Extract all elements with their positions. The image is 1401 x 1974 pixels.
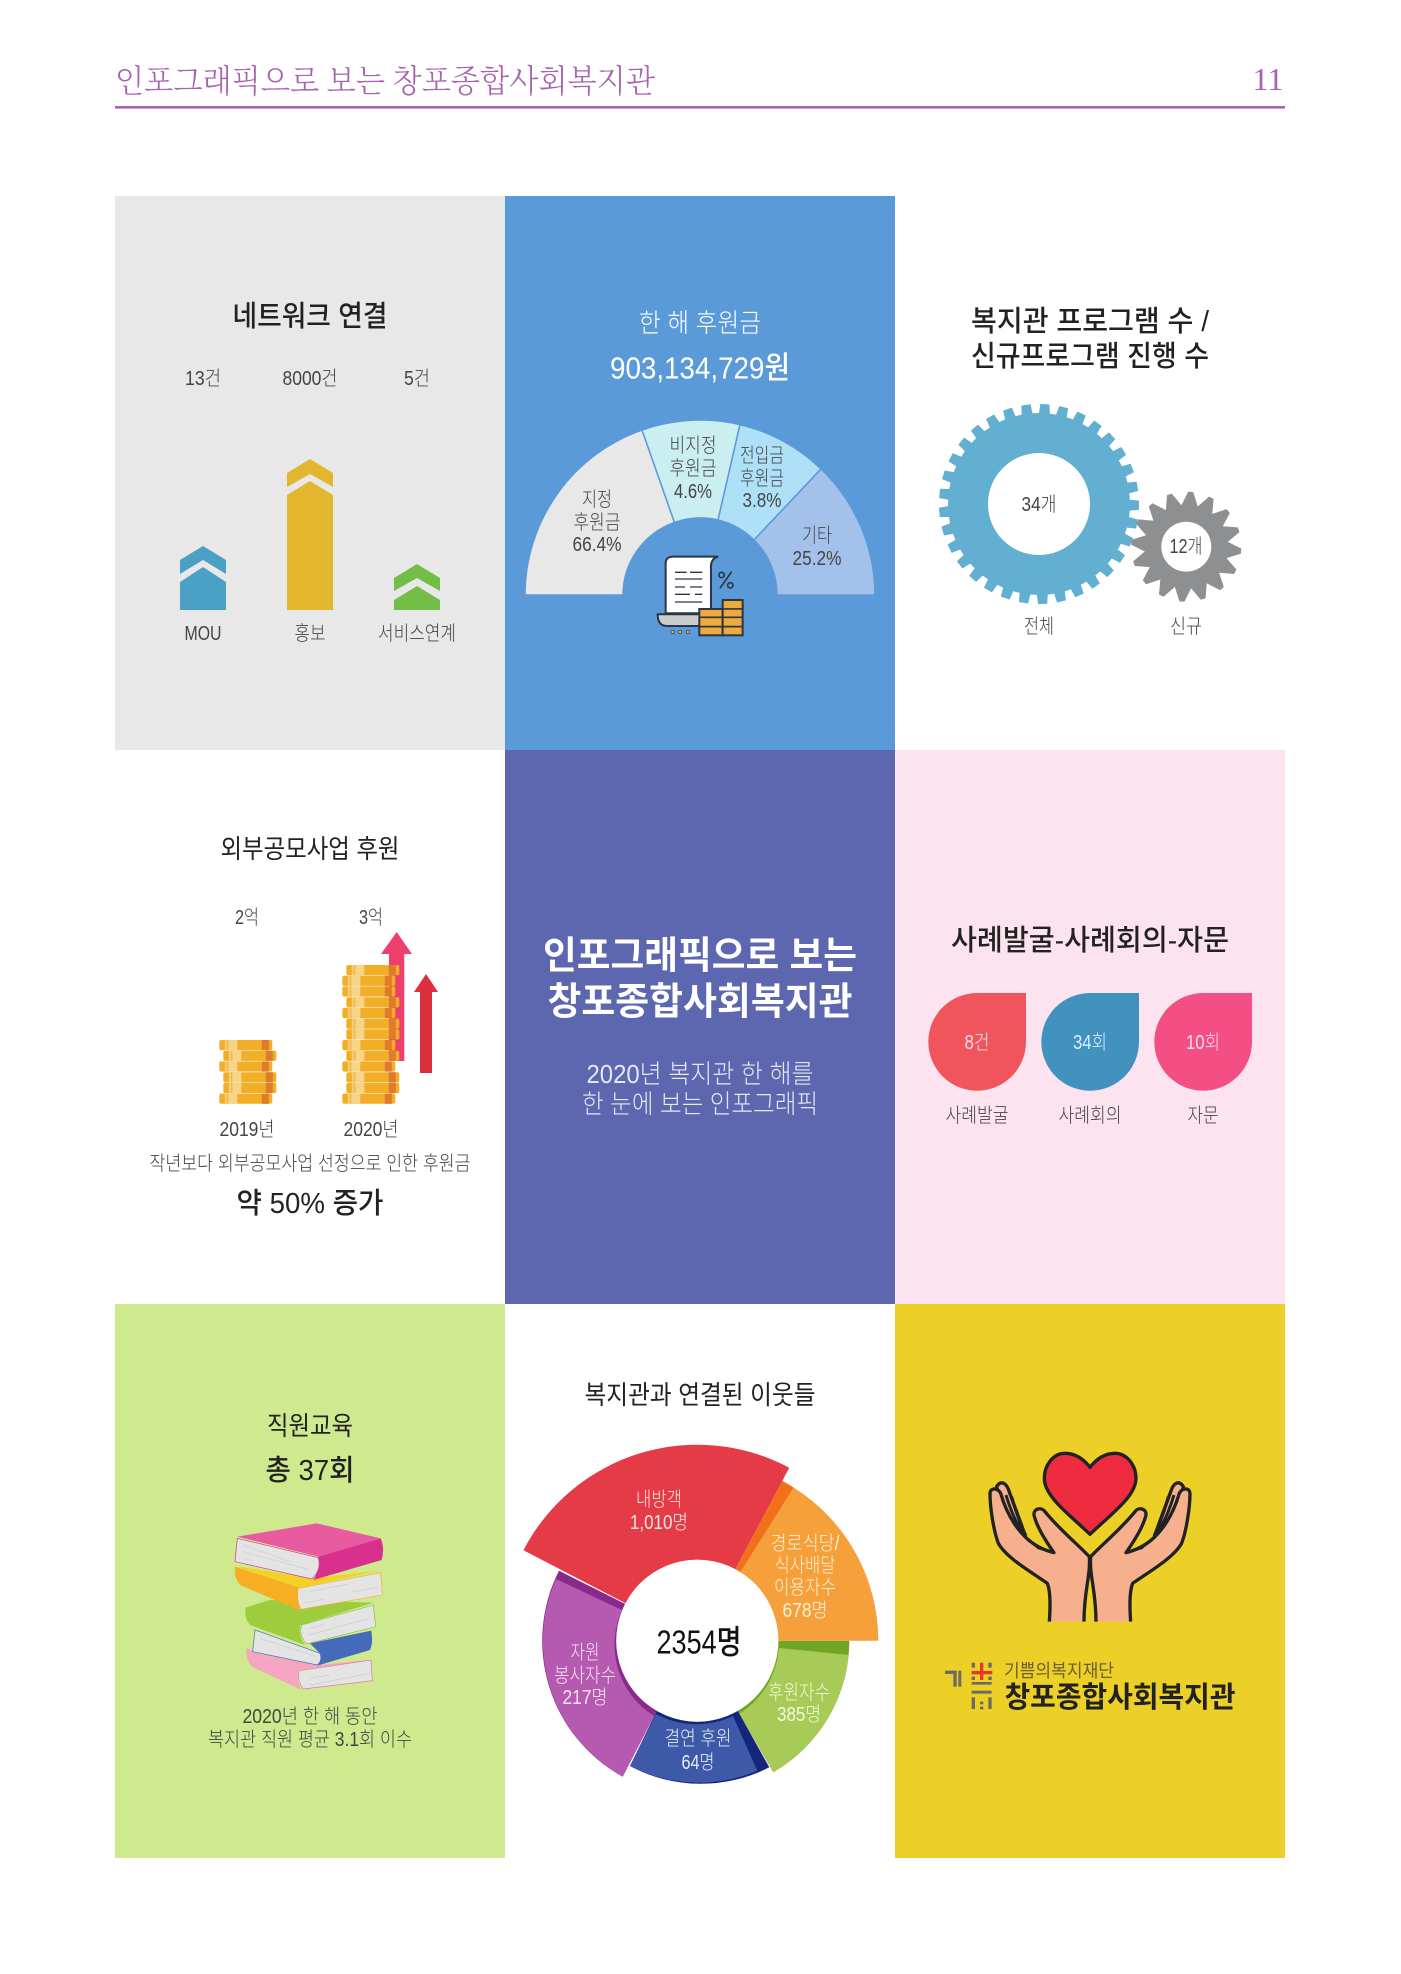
segment label: designated: 후원금	[574, 511, 620, 534]
panel: staff training	[115, 1304, 505, 1858]
drop: consultation	[1154, 993, 1252, 1091]
segment label: meal service: 식사배달	[774, 1554, 836, 1577]
year labels: 2020년	[344, 1118, 398, 1141]
drop values: 10회	[1186, 1031, 1220, 1054]
segment label: non-designated: 비지정	[670, 434, 716, 457]
segment label: non-designated: 4.6%	[674, 481, 712, 503]
icon: receipt and coins	[658, 557, 743, 635]
drop: case meetings	[1041, 993, 1139, 1091]
central subtext: 2020년 복지관 한 해를	[586, 1059, 814, 1089]
segment label: meal service	[770, 1532, 840, 1622]
segment label: transfer: 후원금	[740, 467, 784, 490]
drop labels: 자문	[1188, 1104, 1218, 1127]
segment label: donors	[768, 1681, 830, 1726]
segment label: transfer: 3.8%	[742, 490, 782, 512]
segment label: volunteers: 217명	[562, 1686, 608, 1709]
segment label: sponsorship: 결연 후원	[664, 1727, 732, 1750]
chart total: 2354명	[656, 1624, 742, 1660]
drop values: 8건	[964, 1031, 990, 1054]
heading: program counts: 신규프로그램 진행 수	[971, 340, 1209, 373]
year labels: 2019년	[220, 1118, 274, 1141]
panel: annual donations	[505, 196, 895, 750]
heading: program counts	[971, 305, 1210, 373]
segment label: designated: 66.4%	[572, 534, 622, 556]
segment label: other: 25.2%	[792, 548, 842, 570]
central subtext: 한 눈에 보는 인포그래픽	[582, 1089, 818, 1119]
value labels: 13건	[185, 367, 221, 390]
segment label: transfer	[740, 444, 784, 512]
heading: network: 네트워크 연결	[232, 300, 388, 333]
bar: service linkage	[394, 564, 440, 610]
heading: annual donations: 한 해 후원금	[639, 308, 761, 338]
training note	[208, 1705, 412, 1751]
category labels: 서비스연계	[378, 622, 456, 645]
coin stack 2020	[342, 965, 399, 1104]
drop labels	[946, 1104, 1218, 1127]
panel: external grants	[150, 834, 470, 1220]
panel: program counts	[939, 305, 1242, 638]
segment label: non-designated	[670, 434, 716, 503]
segment label: non-designated: 후원금	[670, 457, 716, 480]
logo text: welfare center: 창포종합사회복지관	[1004, 1681, 1236, 1714]
heading: case management: 사례발굴-사례회의-자문	[951, 924, 1229, 957]
heading: staff training: 직원교육	[267, 1411, 353, 1441]
central heading: 창포종합사회복지관	[548, 982, 852, 1024]
segment label: visitors: 1,010명	[630, 1511, 688, 1534]
segment label: visitors	[630, 1488, 688, 1534]
header title: 인포그래픽으로 보는 창포종합사회복지관	[115, 63, 655, 99]
total training count: 총 37회	[266, 1454, 354, 1487]
segment label: volunteers: 자원	[570, 1641, 600, 1664]
grant increase: 약 50% 증가	[236, 1187, 384, 1220]
value labels: 8000건	[282, 367, 338, 390]
panel: connected neighbours	[523, 1380, 878, 1784]
panel: case management	[895, 750, 1285, 1304]
segment label: transfer: 전입금	[740, 444, 784, 467]
total donation amount: 903,134,729원	[610, 350, 790, 386]
heading: program counts: 복지관 프로그램 수 /	[971, 305, 1210, 338]
category labels	[184, 622, 456, 645]
logo text: foundation: 기쁨의복지재단	[1004, 1661, 1114, 1681]
bar: promotion	[287, 459, 333, 610]
icon: small gear	[1131, 491, 1242, 602]
gear labels	[1022, 493, 1202, 638]
gear labels: 34개	[1022, 493, 1056, 516]
segment label: designated	[572, 488, 622, 556]
segment label: other	[792, 524, 842, 570]
grant note: 작년보다 외부공모사업 선정으로 인한 후원금	[150, 1152, 470, 1175]
segment label: donors: 385명	[777, 1703, 821, 1726]
radial donut chart	[523, 1445, 878, 1784]
value labels: 2억	[235, 906, 259, 929]
segment label: meal service: 이용자수	[774, 1576, 836, 1599]
category labels: 홍보	[294, 622, 326, 645]
segment label: meal service: 678명	[782, 1599, 828, 1622]
segment label: volunteers: 봉사자수	[554, 1664, 616, 1687]
training note: 2020년 한 해 동안	[242, 1705, 378, 1728]
drop labels: 사례발굴	[946, 1104, 1008, 1127]
central subtext	[582, 1059, 818, 1119]
coin stack 2019	[219, 1040, 276, 1104]
value labels: 5건	[404, 367, 430, 390]
icon: stack of books	[235, 1523, 383, 1690]
gear labels: 12개	[1170, 535, 1202, 558]
panel: central title	[505, 750, 895, 1304]
segment label: donors: 후원자수	[768, 1681, 830, 1704]
drop values	[964, 1031, 1220, 1054]
gear labels: 전체	[1024, 615, 1054, 638]
drop: case discovery	[928, 993, 1026, 1091]
central heading	[543, 936, 857, 1024]
value labels	[235, 906, 383, 929]
segment label: designated: 지정	[582, 488, 612, 511]
segment label: sponsorship: 64명	[682, 1751, 714, 1774]
segment label: sponsorship	[664, 1727, 732, 1774]
drop values: 34회	[1073, 1031, 1107, 1054]
drop labels: 사례회의	[1058, 1104, 1122, 1127]
segment label: volunteers	[554, 1641, 616, 1709]
value labels: 3억	[359, 906, 383, 929]
arrow: pink	[381, 932, 412, 1061]
semi donut chart	[525, 420, 875, 595]
logo mark	[945, 1663, 992, 1709]
category labels: MOU	[184, 623, 222, 645]
arrow: red	[414, 974, 438, 1073]
segment label: visitors: 내방객	[636, 1488, 682, 1511]
segment label: other: 기타	[802, 524, 832, 547]
segment label: meal service: 경로식당/	[770, 1532, 840, 1555]
central heading: 인포그래픽으로 보는	[543, 936, 857, 978]
heading: connected neighbours: 복지관과 연결된 이웃들	[584, 1380, 816, 1410]
gear labels: 신규	[1170, 615, 1202, 638]
icon: hands holding heart	[990, 1453, 1190, 1622]
bar: MOU	[180, 546, 226, 610]
icon: large gear	[939, 404, 1139, 604]
training note: 복지관 직원 평균 3.1회 이수	[208, 1728, 412, 1751]
page header	[115, 61, 1285, 109]
heading: external grants: 외부공모사업 후원	[220, 834, 400, 864]
panel: network connections	[115, 196, 505, 750]
panel: foundation logo	[895, 1304, 1285, 1858]
year labels	[220, 1118, 398, 1141]
page number: 11	[1252, 61, 1284, 97]
value labels	[185, 367, 430, 390]
